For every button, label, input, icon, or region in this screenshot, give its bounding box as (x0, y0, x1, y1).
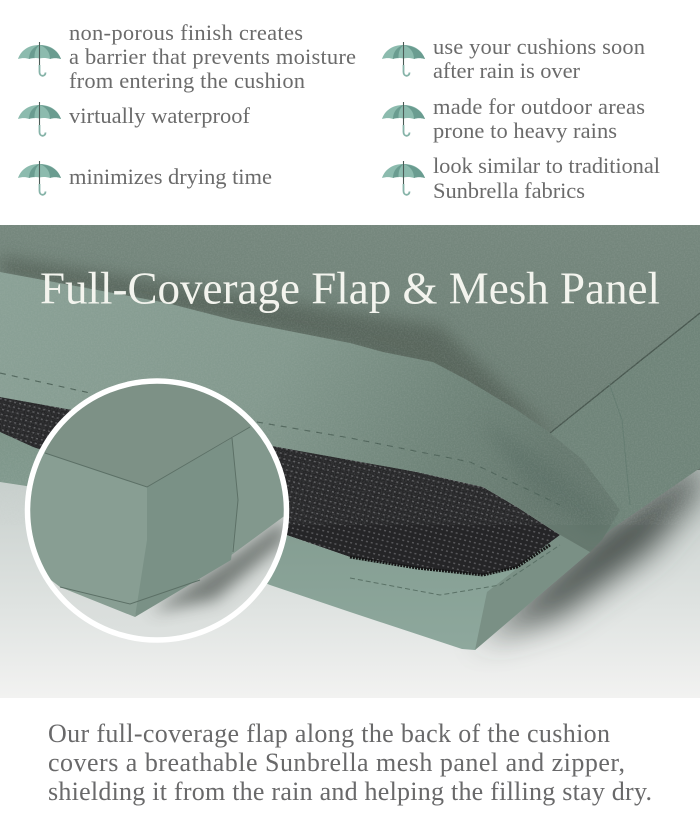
lens right face (135, 438, 238, 617)
text: look similar to traditional: look similar to traditional (433, 153, 660, 178)
text: virtually waterproof: virtually waterproof (69, 103, 250, 128)
feature list: left column (18, 20, 356, 195)
text: minimizes drying time: minimizes drying time (69, 164, 272, 189)
icon: umbrella, use soon after rain (382, 42, 425, 76)
icon: umbrella, virtually waterproof (18, 102, 61, 136)
icon: umbrella, outdoor areas (382, 102, 425, 136)
fabric texture (0, 225, 700, 525)
lens ring (28, 381, 286, 640)
lens seams (45, 427, 250, 604)
text: made for outdoor areas (433, 94, 645, 143)
description text: shielding it from the rain and helping the filling stay dry. (48, 777, 652, 806)
feature list: right column (382, 34, 660, 203)
flap cast shadow (0, 256, 560, 440)
text: non-porous finish (69, 20, 356, 93)
lower flap (0, 432, 590, 650)
icon: umbrella, minimizes drying time (18, 161, 61, 195)
panel: cushion illustration (0, 225, 700, 698)
lens floor (44, 432, 284, 637)
right gusset (551, 428, 700, 533)
text: look similar to traditional (433, 153, 660, 203)
icon: umbrella, non-porous finish (18, 42, 61, 76)
flap fold shading (514, 451, 544, 482)
title: Full-Coverage Flap & Mesh Panel (40, 264, 660, 314)
lens content (25, 380, 290, 645)
text: made for outdoor areas: made for outdoor areas (433, 94, 645, 119)
description text: Our full-coverage flap along the back of the cushion (48, 719, 610, 748)
floor (0, 470, 700, 698)
text: look similar to traditional: Sunbrella fabrics (433, 178, 585, 203)
main flap (0, 272, 620, 552)
text: made for outdoor areas: prone to heavy rains (433, 118, 617, 143)
floor shadow (480, 460, 700, 640)
lens top face (44, 384, 252, 486)
icon: umbrella, similar look (382, 161, 425, 195)
flap stitching (0, 373, 560, 505)
lower flap side face (475, 535, 590, 650)
callout: corner detail lens (25, 380, 290, 645)
lens left face (25, 447, 147, 617)
text: use your cushions soon: use your cushions soon (433, 34, 645, 59)
lens floor shadow (150, 518, 285, 612)
description text: covers a breathable Sunbrella mesh panel and zipper, (48, 748, 625, 777)
text: non-porous finish: from entering the cushion (69, 68, 305, 93)
text: use your cushions soon: after rain is over (433, 58, 580, 83)
gusset seam (550, 313, 700, 433)
lens far gusset (232, 426, 284, 555)
description text (48, 719, 652, 806)
lower flap stitching (350, 545, 560, 595)
cushion top surface (0, 225, 700, 470)
text: use your cushions soon (433, 34, 645, 83)
text: non-porous finish: a barrier that prevents moisture (69, 44, 356, 69)
mesh panel (0, 397, 560, 575)
zipper (350, 545, 550, 575)
text: non-porous finish: non-porous finish creates (69, 20, 303, 45)
